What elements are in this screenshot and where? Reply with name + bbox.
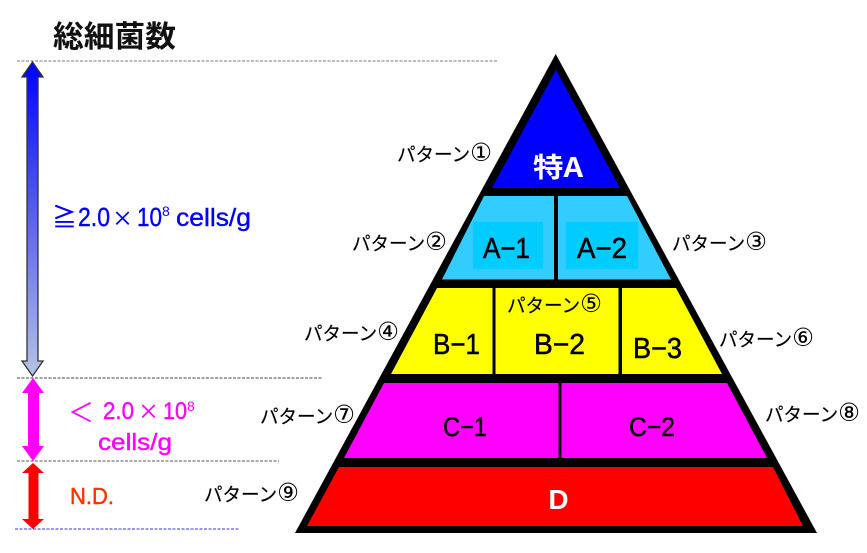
tier: D: D: [548, 484, 569, 515]
pattern labels: パターン③: [672, 227, 767, 256]
tier: B: [391, 288, 722, 374]
pattern labels: パターン④: [304, 317, 399, 346]
label: low count: [68, 393, 195, 455]
label: not detected: N.D.: [70, 483, 114, 509]
pattern labels: パターン①: [397, 138, 492, 167]
pattern labels: パターン⑨: [204, 478, 299, 507]
title: 総細菌数: [53, 12, 176, 56]
label: low count: ×: [138, 396, 159, 426]
tier: special A: 特A: [533, 146, 584, 185]
arrow: low count range: [22, 378, 44, 461]
label: high count: ×: [112, 203, 133, 233]
arrow: not detected range: [22, 463, 44, 529]
label: low count: 10: [163, 398, 187, 425]
pyramid: [295, 54, 817, 533]
label: high count: 2.0: [78, 202, 110, 232]
tier: special A: [492, 70, 620, 188]
label: high count: ≧: [52, 198, 77, 234]
pattern labels: パターン②: [352, 227, 447, 256]
tier: A: A−2: [577, 233, 627, 265]
tier: A: [442, 196, 671, 280]
pattern labels: パターン⑧: [765, 398, 860, 427]
label: low count: 8: [187, 398, 195, 414]
arrow: high count range: [22, 62, 43, 376]
tier: B: B−2: [534, 329, 585, 361]
label: low count: 2.0: [103, 398, 134, 425]
pattern labels: パターン⑥: [719, 323, 814, 352]
tier: D: [307, 467, 803, 526]
tier: C: [344, 383, 767, 458]
pattern labels: パターン⑤: [507, 289, 602, 318]
label: low count: cells/g: [98, 429, 172, 455]
pattern labels: パターン⑦: [260, 400, 355, 429]
pattern labels: [204, 138, 860, 507]
label: low count: ＜: [68, 393, 94, 430]
tier: C: C−1: [443, 412, 487, 442]
label: high count: 8: [162, 203, 170, 219]
tier: B: B−1: [433, 329, 480, 361]
tier: C: C−2: [629, 412, 675, 442]
tier: B: B−3: [633, 333, 682, 365]
label: high count: [52, 198, 251, 234]
pyramid outline: [295, 54, 817, 533]
label: high count: 10: [137, 202, 162, 232]
label: high count: cells/g: [176, 204, 251, 232]
tier: A: A−1: [483, 233, 530, 265]
